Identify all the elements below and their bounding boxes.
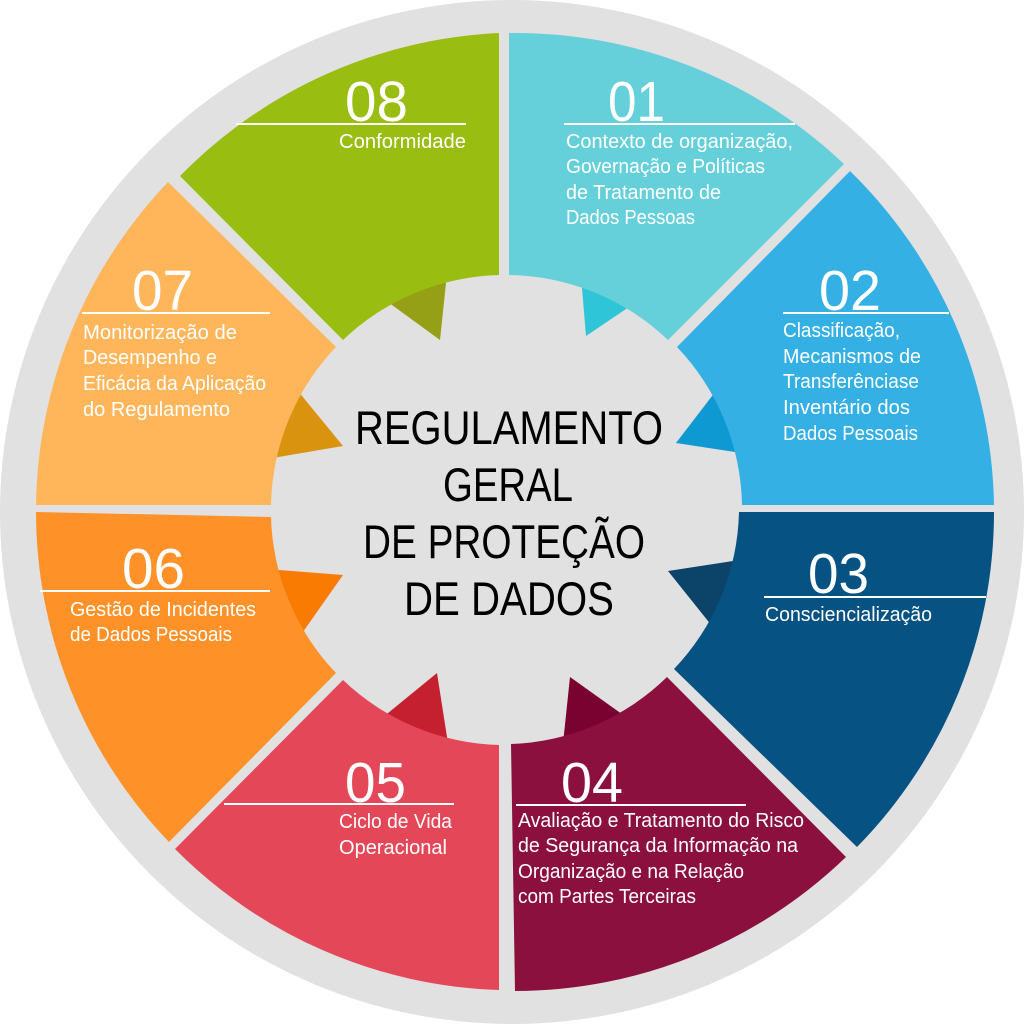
text 07: Desempenho e xyxy=(83,347,217,369)
text 06: Gestão de Incidentes xyxy=(70,599,256,621)
text 04: Avaliação e Tratamento do Risco xyxy=(518,810,804,832)
wedge 06 xyxy=(36,512,336,842)
number 02: 02 xyxy=(819,259,881,323)
text 04 xyxy=(518,810,804,908)
number 01: 01 xyxy=(608,70,665,134)
panel: 01 xyxy=(509,33,844,340)
text 05: Ciclo de Vida xyxy=(339,811,453,833)
wedge 05 xyxy=(175,680,499,990)
tooth marker 04 xyxy=(563,677,626,743)
tooth marker 08 xyxy=(385,274,447,340)
number 05: 05 xyxy=(345,751,406,815)
tooth marker 07 xyxy=(268,388,343,459)
text 02 xyxy=(783,320,921,445)
title xyxy=(355,401,663,625)
text 07: do Regulamento xyxy=(83,399,230,421)
text 01: Governação e Políticas xyxy=(566,156,765,178)
panel: 05 xyxy=(175,673,499,990)
text 07: Eficácia da Aplicação xyxy=(83,373,266,395)
number 08: 08 xyxy=(345,70,408,134)
tooth marker 06 xyxy=(269,569,343,637)
text 01: Dados Pessoas xyxy=(566,207,695,229)
number 07: 07 xyxy=(132,259,193,323)
text 07: Monitorização de xyxy=(83,322,237,344)
text 01 xyxy=(566,131,793,229)
text 01: Contexto de organização, xyxy=(566,131,793,153)
panel: 04 xyxy=(511,677,846,991)
text 03: Consciencialização xyxy=(765,604,932,626)
tooth marker 03 xyxy=(668,560,743,628)
text 07 xyxy=(83,322,266,421)
text 05 xyxy=(339,811,453,859)
title: DE DADOS xyxy=(404,572,614,625)
text 06 xyxy=(70,599,256,646)
wedge 01 xyxy=(509,33,844,340)
wedge 08 xyxy=(180,33,499,340)
tooth marker 01 xyxy=(581,281,632,336)
tooth marker 02 xyxy=(676,389,744,453)
text 05: Operacional xyxy=(339,837,447,859)
text 04: de Segurança da Informação na xyxy=(518,835,799,857)
tooth marker 05 xyxy=(381,673,448,747)
text 02: Classificação, xyxy=(783,320,900,342)
title: GERAL xyxy=(443,458,573,511)
text 02: Inventário dos xyxy=(783,397,910,419)
number 06: 06 xyxy=(122,537,185,601)
wedge 02 xyxy=(677,171,994,505)
text 02: Mecanismos de xyxy=(783,346,921,368)
wedge 04 xyxy=(511,677,846,991)
panel: 03 xyxy=(668,512,994,847)
number 04: 04 xyxy=(561,751,623,815)
text 08: Conformidade xyxy=(339,131,466,153)
panel: 08 xyxy=(180,33,499,340)
text 02: Transferênciase xyxy=(783,371,919,393)
title: DE PROTEÇÃO xyxy=(363,515,645,568)
text 06: de Dados Pessoais xyxy=(70,624,232,646)
text 01: de Tratamento de xyxy=(566,182,721,204)
text 02: Dados Pessoais xyxy=(783,423,918,445)
wedge 07 xyxy=(36,182,336,505)
text 04: com Partes Terceiras xyxy=(518,886,696,908)
panel: 07 xyxy=(36,182,343,505)
number 03: 03 xyxy=(808,542,869,606)
text 04: Organização e na Relação xyxy=(518,861,744,883)
title: REGULAMENTO xyxy=(355,401,663,454)
panel: 06 xyxy=(36,512,343,842)
wedge 03 xyxy=(674,512,994,847)
panel: 02 xyxy=(676,171,994,505)
